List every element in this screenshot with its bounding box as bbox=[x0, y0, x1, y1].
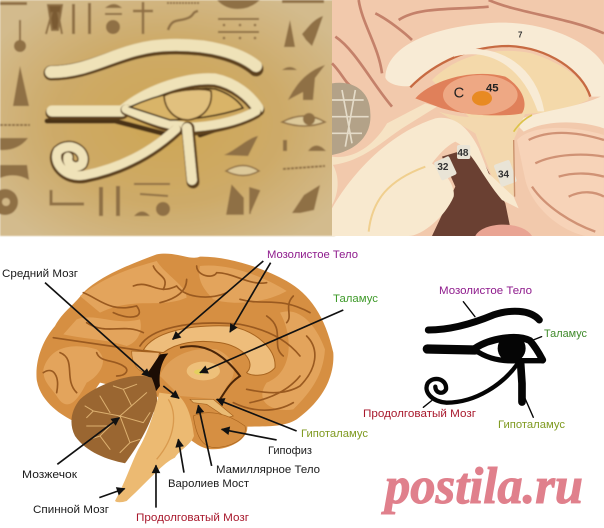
brainstem bbox=[115, 393, 194, 502]
label: Варолиев Мост: Варолиев Мост bbox=[168, 478, 249, 490]
corpus callosum bbox=[143, 326, 275, 375]
tag numbers: 48 bbox=[457, 148, 469, 159]
label: Гипофиз: Гипофиз bbox=[268, 445, 312, 457]
cerebellum bbox=[71, 376, 157, 463]
inner light region bbox=[432, 51, 589, 120]
tear drop bbox=[521, 363, 522, 402]
panel: labelled brain diagram bbox=[36, 254, 343, 508]
label: Гипоталамус (eye): Гипоталамус bbox=[498, 419, 566, 431]
hypothalamus wedge bbox=[190, 399, 233, 418]
left band bbox=[427, 335, 475, 364]
eyebrow bbox=[428, 311, 539, 330]
tag numbers: 32 bbox=[437, 162, 449, 173]
upper lid bbox=[475, 337, 543, 360]
panel: Eye of Horus relief bbox=[0, 0, 335, 236]
sulci bbox=[43, 266, 315, 410]
pons ridge bbox=[332, 103, 437, 165]
cerebellum arbor bbox=[85, 384, 150, 453]
label: Гипоталамус (brain): Гипоталамус bbox=[301, 428, 369, 440]
label: Продолговатый Мозг (eye): Продолговатый Мозг bbox=[363, 408, 476, 420]
watermark: postila.ru: postila.ru bbox=[381, 458, 583, 515]
dark hollow under stem bbox=[432, 147, 512, 236]
tag numbers bbox=[437, 30, 523, 180]
stem inner stripe bbox=[369, 167, 425, 232]
midbrain and hypothalamus area bbox=[439, 112, 525, 197]
spiral tail bbox=[427, 365, 517, 403]
label: Таламус (eye): Таламус bbox=[544, 328, 587, 340]
specimen tags bbox=[434, 145, 517, 187]
relief: eye interior and iris bbox=[130, 89, 243, 120]
pituitary and temporal lobe bbox=[193, 413, 245, 448]
lower lid bbox=[475, 350, 542, 361]
label: Мозолистое Тело (brain): Мозолистое Тело bbox=[267, 249, 358, 261]
brain cortex silhouette bbox=[36, 254, 333, 449]
pupil bbox=[498, 334, 526, 362]
right lower gyri bbox=[517, 128, 604, 236]
gyri highlights bbox=[43, 261, 325, 410]
thalamus labels: C bbox=[454, 85, 465, 101]
dark fold line bbox=[180, 346, 240, 399]
leader lines bbox=[423, 302, 542, 417]
relief: eye of Horus bbox=[47, 45, 258, 182]
hieroglyphs bbox=[0, 0, 326, 216]
panel: brain dissection photo bbox=[332, 0, 604, 236]
inner wedge below fold bbox=[132, 351, 159, 373]
dark fissure around callosum bbox=[410, 46, 590, 97]
leader arrows bbox=[45, 261, 343, 508]
corpus callosum bbox=[385, 23, 604, 97]
brainstem cream lobe bbox=[332, 118, 519, 236]
red ventricle rim bbox=[415, 74, 525, 115]
label: Спинной Мозг: Спинной Мозг bbox=[33, 504, 109, 516]
fornix bbox=[455, 50, 543, 110]
label: Мозолистое Тело (eye): Мозолистое Тело bbox=[439, 285, 532, 297]
diagram: black eye of Horus bbox=[423, 302, 543, 417]
label: Мамиллярное Тело: Мамиллярное Тело bbox=[216, 464, 320, 476]
gyri creases bbox=[529, 133, 604, 232]
panel: brain dissection photo: 45 bbox=[486, 83, 499, 95]
cortical folds bbox=[332, 0, 604, 107]
thalamus bbox=[443, 75, 518, 115]
cerebellum slice bbox=[332, 83, 370, 155]
label: Таламус (brain): Таламус bbox=[333, 293, 379, 305]
tag numbers: 7 bbox=[518, 30, 523, 39]
tag numbers: 34 bbox=[498, 169, 510, 180]
label: Средний Мозг: Средний Мозг bbox=[2, 268, 78, 280]
midbrain dark cavity bbox=[147, 353, 168, 393]
thalamus region bbox=[160, 349, 234, 399]
label: Мозжечок: Мозжечок bbox=[22, 469, 77, 481]
label: Продолговатый Мозг (brain): Продолговатый Мозг bbox=[136, 512, 249, 524]
